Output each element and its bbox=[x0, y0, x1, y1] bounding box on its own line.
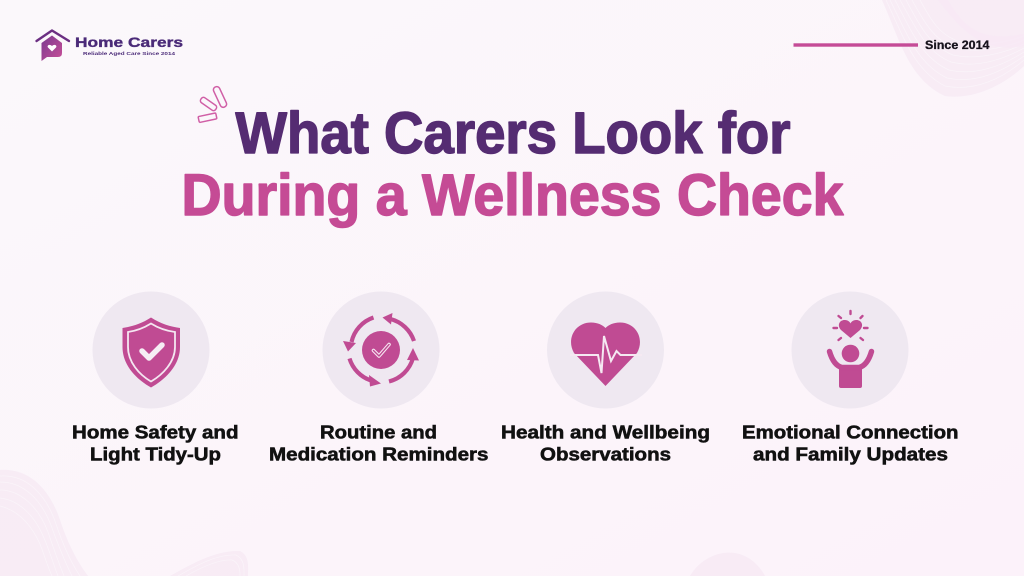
icon: shield with check bbox=[122, 318, 180, 388]
label: Medication Reminders bbox=[269, 444, 488, 464]
title line 1: What Carers Look for bbox=[236, 101, 790, 166]
label: Observations bbox=[540, 444, 671, 464]
tagline: Reliable Aged Care Since 2014 bbox=[83, 51, 175, 57]
icon circle bbox=[547, 292, 664, 408]
label bbox=[72, 422, 238, 464]
icon: heart with pulse bbox=[570, 322, 642, 386]
label: and Family Updates bbox=[753, 444, 948, 464]
label: Health and Wellbeing bbox=[501, 422, 710, 442]
icon: title sparkle marks bbox=[198, 86, 228, 123]
label: Home Safety and bbox=[72, 422, 238, 442]
title line 2: During a Wellness Check bbox=[182, 163, 844, 228]
label bbox=[269, 422, 488, 464]
label: Light Tidy-Up bbox=[90, 444, 221, 464]
panel: health and wellbeing bbox=[501, 292, 710, 464]
panel: home safety bbox=[72, 292, 238, 464]
label bbox=[742, 422, 958, 464]
panel: routine and medication bbox=[269, 292, 488, 464]
icon circle bbox=[792, 292, 908, 408]
logo bbox=[36, 30, 183, 61]
icon: circular arrows with check bbox=[343, 313, 419, 386]
label: Routine and bbox=[320, 422, 437, 442]
since text: Since 2014 bbox=[925, 38, 990, 52]
icon circle bbox=[92, 292, 210, 408]
title bbox=[182, 101, 844, 228]
label bbox=[501, 422, 710, 464]
icon: home speech bubble bbox=[36, 30, 69, 61]
icon circle bbox=[322, 292, 440, 408]
brand name: Home Carers bbox=[75, 35, 183, 50]
label: Emotional Connection bbox=[742, 422, 958, 442]
since badge bbox=[794, 38, 990, 52]
panel: emotional connection bbox=[742, 292, 958, 464]
divider line bbox=[794, 43, 918, 47]
icon: person raising arms with heart bbox=[830, 311, 872, 388]
